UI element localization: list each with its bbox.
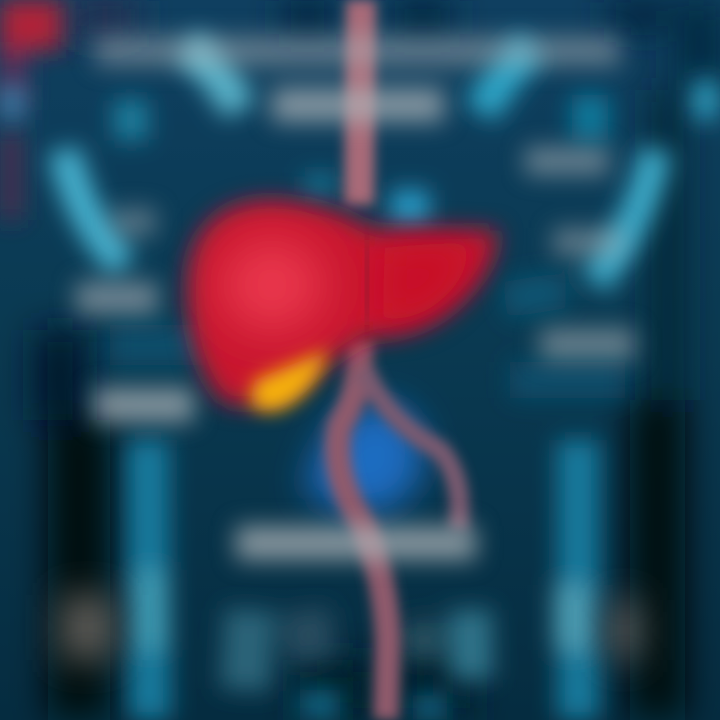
title line one xyxy=(95,36,620,66)
lobe divide xyxy=(366,240,368,325)
left lower label xyxy=(94,388,194,422)
liver body xyxy=(188,200,498,405)
shoulder glow xyxy=(0,0,62,220)
side dark-grey blocks xyxy=(60,595,640,660)
upper right label xyxy=(525,147,609,175)
artery xyxy=(338,0,460,720)
right lower label xyxy=(540,328,635,360)
left lobe xyxy=(382,243,475,322)
title line two xyxy=(272,88,444,122)
right lobe highlight xyxy=(220,239,324,331)
right label xyxy=(553,228,623,256)
illegible title and text labels xyxy=(76,36,635,560)
blue kidney shape xyxy=(305,404,423,512)
left upper label xyxy=(112,208,156,236)
gallbladder xyxy=(250,350,328,411)
bottom label xyxy=(236,526,476,560)
left label xyxy=(76,282,158,314)
liver xyxy=(188,200,498,411)
